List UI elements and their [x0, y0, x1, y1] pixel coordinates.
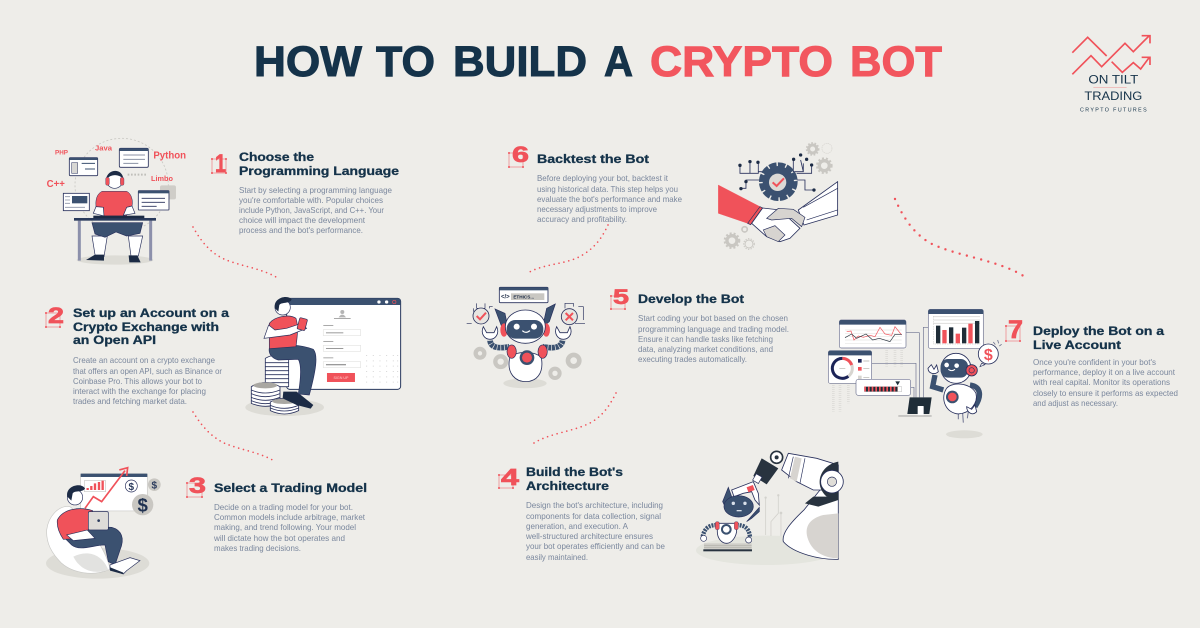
- heading: Backtest the Bot: [537, 152, 649, 166]
- body text: Once you're confident in your bot's: [1033, 357, 1156, 367]
- step 5 text: [610, 286, 789, 364]
- body text: Start coding your bot based on the chosen: [638, 313, 788, 323]
- body text: using historical data. This step helps you: [537, 184, 678, 194]
- body text: programming language and trading model.: [638, 324, 789, 334]
- heading: an Open API: [73, 333, 156, 347]
- dotted connector: step 1 to 2: [193, 227, 276, 277]
- heading: Develop the Bot: [638, 292, 744, 306]
- title: HOW: [254, 38, 362, 86]
- panel: step 3 illustration, person on beanbag with charts: [46, 468, 161, 579]
- step 2 text: [45, 303, 229, 406]
- heading: Choose the: [239, 150, 314, 164]
- body text: Common models include arbitrage, market: [214, 512, 366, 522]
- panel: step 5 illustration, ethics robot: [467, 287, 585, 388]
- body text: closely to ensure it performs as expected: [1033, 388, 1178, 398]
- panel: step 1 illustration, programmer at desk: C++: [47, 179, 65, 190]
- dotted connector: step 2 to 3: [193, 412, 276, 462]
- body text: with real capital. Monitor its operations: [1032, 377, 1170, 387]
- body text: Coinbase Pro. This allows your bot to: [73, 376, 202, 386]
- step 7 text: [1005, 316, 1178, 408]
- heading: Select a Trading Model: [214, 481, 367, 495]
- body text: generation, and execution. A: [526, 521, 628, 531]
- heading: [1033, 324, 1164, 352]
- title: CRYPTO: [650, 38, 833, 86]
- title: BUILD: [453, 38, 587, 86]
- body text: executing trades automatically.: [638, 354, 747, 364]
- body text: you're comfortable with. Popular choices: [239, 195, 383, 205]
- number 2: [45, 303, 64, 328]
- heading: Crypto Exchange with: [73, 320, 219, 334]
- heading: Set up an Account on a: [73, 306, 229, 320]
- body text: [73, 355, 222, 406]
- panel: step 5 illustration, ethics robot: </>: [501, 295, 510, 301]
- body text: Decide on a trading model for your bot.: [214, 502, 353, 512]
- panel: step 7 illustration, dashboards and robot: [828, 309, 1002, 438]
- body text: that offers an open API, such as Binance or: [73, 366, 222, 376]
- body text: components for data collection, signal: [526, 511, 661, 521]
- number 5: [610, 286, 629, 310]
- body text: Create an account on a crypto exchange: [73, 355, 215, 365]
- body text: [525, 500, 665, 562]
- heading: Live Account: [1033, 338, 1121, 352]
- body text: Design the bot's architecture, including: [526, 500, 663, 510]
- body text: [213, 502, 366, 553]
- panel: step 1 illustration, programmer at desk: PHP: [55, 149, 68, 156]
- body text: interact with the exchange for placing: [73, 386, 206, 396]
- heading: [73, 306, 229, 347]
- panel: step 1 illustration, programmer at desk: [47, 138, 186, 265]
- body text: [638, 313, 789, 364]
- body text: and adjust as necessary.: [1033, 398, 1118, 408]
- heading: Build the Bot's: [526, 465, 623, 479]
- body text: Before deploying your bot, backtest it: [537, 173, 669, 183]
- body text: accuracy and profitability.: [537, 214, 627, 224]
- number 3: 3: [189, 473, 206, 498]
- number 6: 6: [512, 142, 529, 167]
- body text: well-structured architecture ensures: [525, 531, 653, 541]
- panel: step 6 illustration, AI brain and handshake: [718, 143, 838, 249]
- body text: Start by selecting a programming language: [239, 185, 392, 195]
- number 1: 1: [215, 150, 226, 178]
- body text: process and the bot's performance.: [239, 225, 363, 235]
- title: TO: [376, 38, 435, 86]
- number 1: [211, 150, 227, 178]
- body text: data, analyzing market conditions, and: [638, 344, 773, 354]
- panel: step 2 illustration, sign-up window and person on coins: [245, 297, 401, 416]
- panel: step 1 illustration, programmer at desk: Python: [153, 150, 186, 161]
- body text: making, and trend following. Your model: [214, 522, 356, 532]
- panel: step 1 illustration, programmer at desk: Limbo: [151, 174, 173, 183]
- heading: [526, 465, 623, 493]
- panel: step 2 illustration, sign-up window and person on coins: SIGN UP: [333, 376, 349, 380]
- step 6 text: [508, 142, 682, 224]
- title: A: [604, 38, 633, 86]
- heading: Programming Language: [239, 164, 399, 178]
- step 4 text: [498, 464, 665, 562]
- logo: On Tilt Trading: TRADING: [1084, 89, 1142, 103]
- heading: Architecture: [526, 479, 609, 493]
- body text: [537, 173, 682, 224]
- number 6: [508, 142, 529, 168]
- title: BOT: [850, 38, 942, 86]
- step 3 text: [186, 473, 367, 553]
- panel: step 5 illustration, ethics robot: ETHICS...: [513, 294, 534, 299]
- body text: easily maintained.: [526, 552, 588, 562]
- panel: step 3 illustration, person on beanbag with charts: $: [152, 481, 158, 492]
- body text: include Python, JavaScript, and C++. Your: [239, 205, 384, 215]
- number 7: 7: [1008, 316, 1023, 344]
- panel: step 3 illustration, person on beanbag with charts: $: [137, 495, 148, 516]
- number 2: 2: [48, 303, 64, 328]
- step 1 text: [211, 150, 399, 235]
- body text: Ensure it can handle tasks like fetching: [638, 334, 773, 344]
- body text: trades and fetching market data.: [73, 396, 187, 406]
- body text: performance, deploy it on a live account: [1033, 367, 1176, 377]
- heading: [239, 150, 399, 178]
- body text: will dictate how the bot operates and: [213, 533, 345, 543]
- body text: [239, 185, 392, 235]
- panel: step 1 illustration, programmer at desk: Java: [95, 144, 113, 153]
- body text: choice will impact the development: [239, 215, 366, 225]
- panel: step 4 illustration, robot arm assembling bot: [696, 451, 843, 565]
- number 3: [186, 473, 206, 498]
- body text: necessary adjustments to improve: [537, 204, 657, 214]
- dotted connector: step 5 to 4: [534, 393, 616, 443]
- logo: On Tilt Trading: [1072, 36, 1150, 114]
- body text: your bot operates efficiently and can be: [526, 541, 665, 551]
- number 4: 4: [501, 464, 519, 490]
- body text: evaluate the bot's performance and make: [537, 194, 682, 204]
- panel: step 7 illustration, dashboards and robot: $: [984, 347, 993, 364]
- logo: On Tilt Trading: ON TILT: [1088, 72, 1139, 86]
- body text: makes trading decisions.: [214, 543, 301, 553]
- title: [254, 38, 942, 86]
- dotted connector: step 6 to 5: [526, 225, 608, 274]
- number 5: 5: [613, 286, 629, 309]
- panel: step 3 illustration, person on beanbag with charts: $: [129, 482, 135, 493]
- body text: [1032, 357, 1178, 408]
- heading: Deploy the Bot on a: [1033, 324, 1164, 338]
- dotted connector: step 6 to 7: [895, 199, 1025, 277]
- logo: On Tilt Trading: CRYPTO FUTURES: [1080, 108, 1147, 114]
- number 4: [498, 464, 519, 490]
